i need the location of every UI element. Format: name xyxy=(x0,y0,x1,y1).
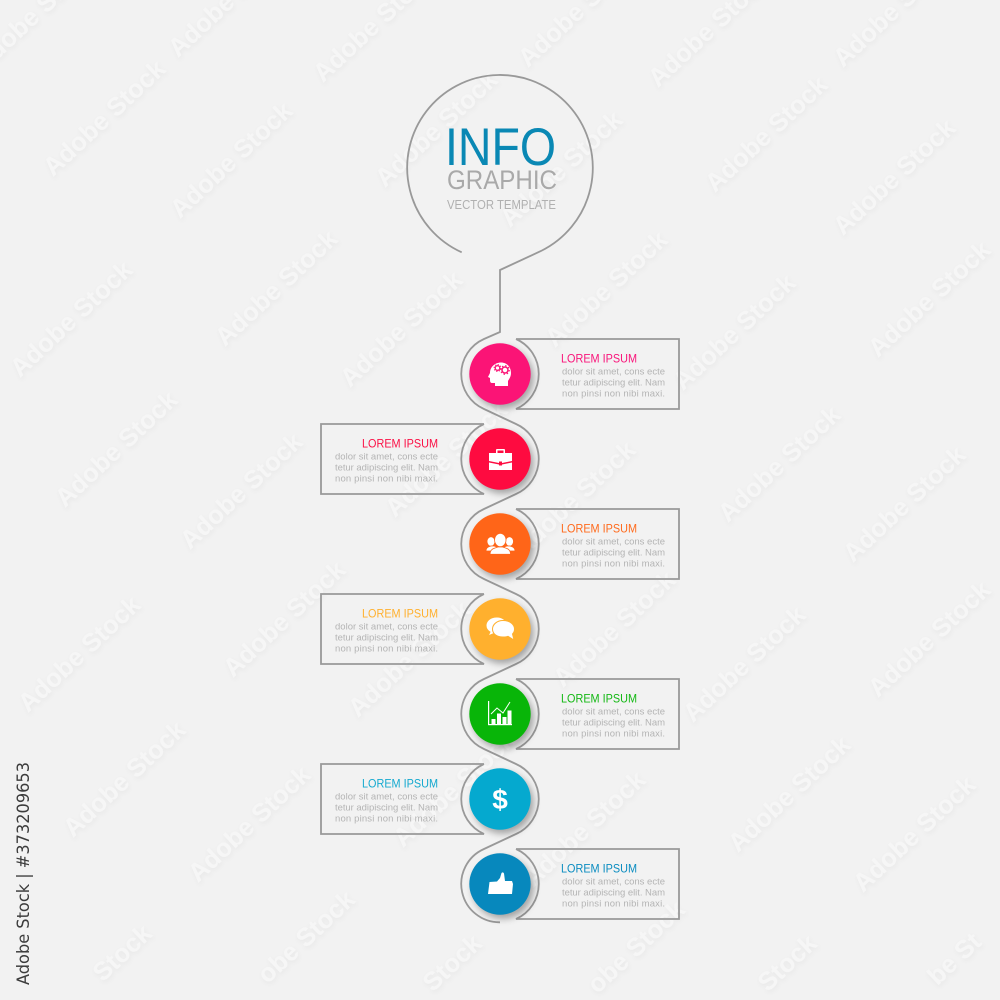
watermark pattern: Adobe Stock xyxy=(863,235,997,363)
watermark pattern: Adobe Stock xyxy=(5,255,139,383)
watermark pattern: Adobe Stock xyxy=(335,265,469,393)
text block xyxy=(335,622,438,654)
text block: dolor sit amet, cons ecte xyxy=(335,452,438,462)
callout box xyxy=(516,509,679,579)
watermark pattern: Adobe Stock xyxy=(678,600,812,728)
watermark pattern: Adobe Stock xyxy=(380,395,514,523)
heading: LOREM IPSUM xyxy=(362,436,438,450)
text block: dolor sit amet, cons ecte xyxy=(562,536,665,548)
watermark pattern: Adobe Stock xyxy=(828,113,962,241)
callout box xyxy=(516,849,679,919)
callout box xyxy=(321,424,484,494)
title: VECTOR TEMPLATE: VECTOR TEMPLATE xyxy=(447,198,556,212)
side credit text: Adobe Stock | #373209653 xyxy=(14,762,34,985)
watermark pattern: Adobe Stock xyxy=(508,435,642,563)
watermark pattern: obe Stock xyxy=(582,895,691,999)
watermark pattern: Adobe Stock xyxy=(723,730,857,858)
text block: dolor sit amet, cons ecte xyxy=(562,366,665,378)
step 4 xyxy=(321,594,531,664)
text block: tetur adipiscing elit. Nam xyxy=(335,802,438,814)
step 3 xyxy=(469,509,679,579)
watermark pattern: Stock xyxy=(88,919,158,987)
watermark pattern: Adobe Stock xyxy=(668,268,802,396)
disc xyxy=(469,598,531,660)
text block xyxy=(562,876,665,910)
watermark pattern: Stock xyxy=(753,929,823,997)
icon: briefcase xyxy=(489,449,512,470)
watermark pattern: Adobe Stock xyxy=(388,725,522,853)
watermark pattern: Adobe Stock xyxy=(175,427,309,555)
disc xyxy=(469,513,531,575)
text block: non pinsi non nibi maxi. xyxy=(335,474,438,484)
watermark pattern: Adobe Stock xyxy=(495,105,629,233)
watermark pattern: Adobe Stock xyxy=(540,225,674,353)
text block: non pinsi non nibi maxi. xyxy=(562,898,665,910)
watermark pattern: Adobe Stock xyxy=(848,770,982,898)
heading: LOREM IPSUM xyxy=(561,522,637,536)
text block: tetur adipiscing elit. Nam xyxy=(335,462,438,474)
watermark pattern: Adobe Stock xyxy=(218,555,352,683)
step 5 xyxy=(469,679,679,749)
icon: head with gears xyxy=(488,362,511,386)
step 1 xyxy=(469,339,679,409)
watermark pattern: Adobe Stock xyxy=(343,595,477,723)
disc xyxy=(469,853,531,915)
watermark pattern: be St xyxy=(922,927,987,991)
text block xyxy=(562,706,665,740)
text block: non pinsi non nibi maxi. xyxy=(562,728,665,740)
callout box xyxy=(516,339,679,409)
heading: LOREM IPSUM xyxy=(362,606,438,620)
text block: tetur adipiscing elit. Nam xyxy=(562,548,665,558)
watermark pattern: Adobe Stock xyxy=(165,96,299,224)
heading: LOREM IPSUM xyxy=(561,352,637,366)
disc xyxy=(469,768,531,830)
icon: thumbs up xyxy=(488,872,513,894)
watermark pattern: Adobe Stock xyxy=(58,715,192,843)
disc xyxy=(469,683,531,745)
watermark pattern: Adobe Stock xyxy=(13,590,147,718)
text block: tetur adipiscing elit. Nam xyxy=(562,378,665,388)
disc xyxy=(469,428,531,490)
text block: non pinsi non nibi maxi. xyxy=(335,814,438,824)
icon: dollar sign: $ xyxy=(492,784,508,815)
text block xyxy=(562,366,665,400)
watermark pattern: Adobe Stock xyxy=(38,54,172,182)
title: GRAPHIC: GRAPHIC xyxy=(447,165,557,195)
text block: dolor sit amet, cons ecte xyxy=(562,876,665,888)
callout box xyxy=(321,764,484,834)
disc xyxy=(469,343,531,405)
watermark pattern: Adobe Stock xyxy=(50,385,184,513)
text block xyxy=(335,792,438,824)
title: INFO: INFO xyxy=(445,118,556,177)
watermark pattern: Adobe Stock xyxy=(838,440,972,568)
text block: non pinsi non nibi maxi. xyxy=(562,558,665,570)
text block: dolor sit amet, cons ecte xyxy=(335,792,438,802)
step 2 xyxy=(321,424,531,494)
watermark pattern: Adobe Stock xyxy=(210,224,344,352)
heading: LOREM IPSUM xyxy=(561,862,637,876)
watermark pattern: Adobe Stock xyxy=(713,400,847,528)
text block: dolor sit amet, cons ecte xyxy=(335,622,438,632)
text block: dolor sit amet, cons ecte xyxy=(562,706,665,718)
step 7 xyxy=(469,849,679,919)
callout box xyxy=(321,594,484,664)
text block: tetur adipiscing elit. Nam xyxy=(562,718,665,728)
title xyxy=(445,118,557,212)
heading: LOREM IPSUM xyxy=(561,692,637,706)
watermark pattern: Adobe Stock xyxy=(370,65,504,193)
icon: bar chart with trend line xyxy=(488,701,512,725)
step 6 xyxy=(321,764,531,834)
text block: non pinsi non nibi maxi. xyxy=(335,644,438,654)
text block: non pinsi non nibi maxi. xyxy=(562,388,665,400)
callout box xyxy=(516,679,679,749)
watermark pattern: Adobe Stock xyxy=(183,760,317,888)
watermark pattern: Adobe Stock xyxy=(700,70,834,198)
text block xyxy=(335,452,438,484)
watermark pattern: Adobe Stock xyxy=(863,575,997,703)
watermark pattern: Adobe Stock xyxy=(548,565,682,693)
text block xyxy=(562,536,665,570)
text block: tetur adipiscing elit. Nam xyxy=(562,888,665,898)
text block: tetur adipiscing elit. Nam xyxy=(335,632,438,644)
watermark pattern: Stock xyxy=(418,929,488,997)
icon: speech bubbles xyxy=(486,617,514,640)
icon: group of people xyxy=(486,533,515,554)
title balloon outline and serpentine connector xyxy=(407,75,593,922)
watermark pattern: Adobe Stock xyxy=(518,765,652,893)
watermark pattern: obe Stock xyxy=(252,885,361,989)
heading: LOREM IPSUM xyxy=(362,776,438,790)
